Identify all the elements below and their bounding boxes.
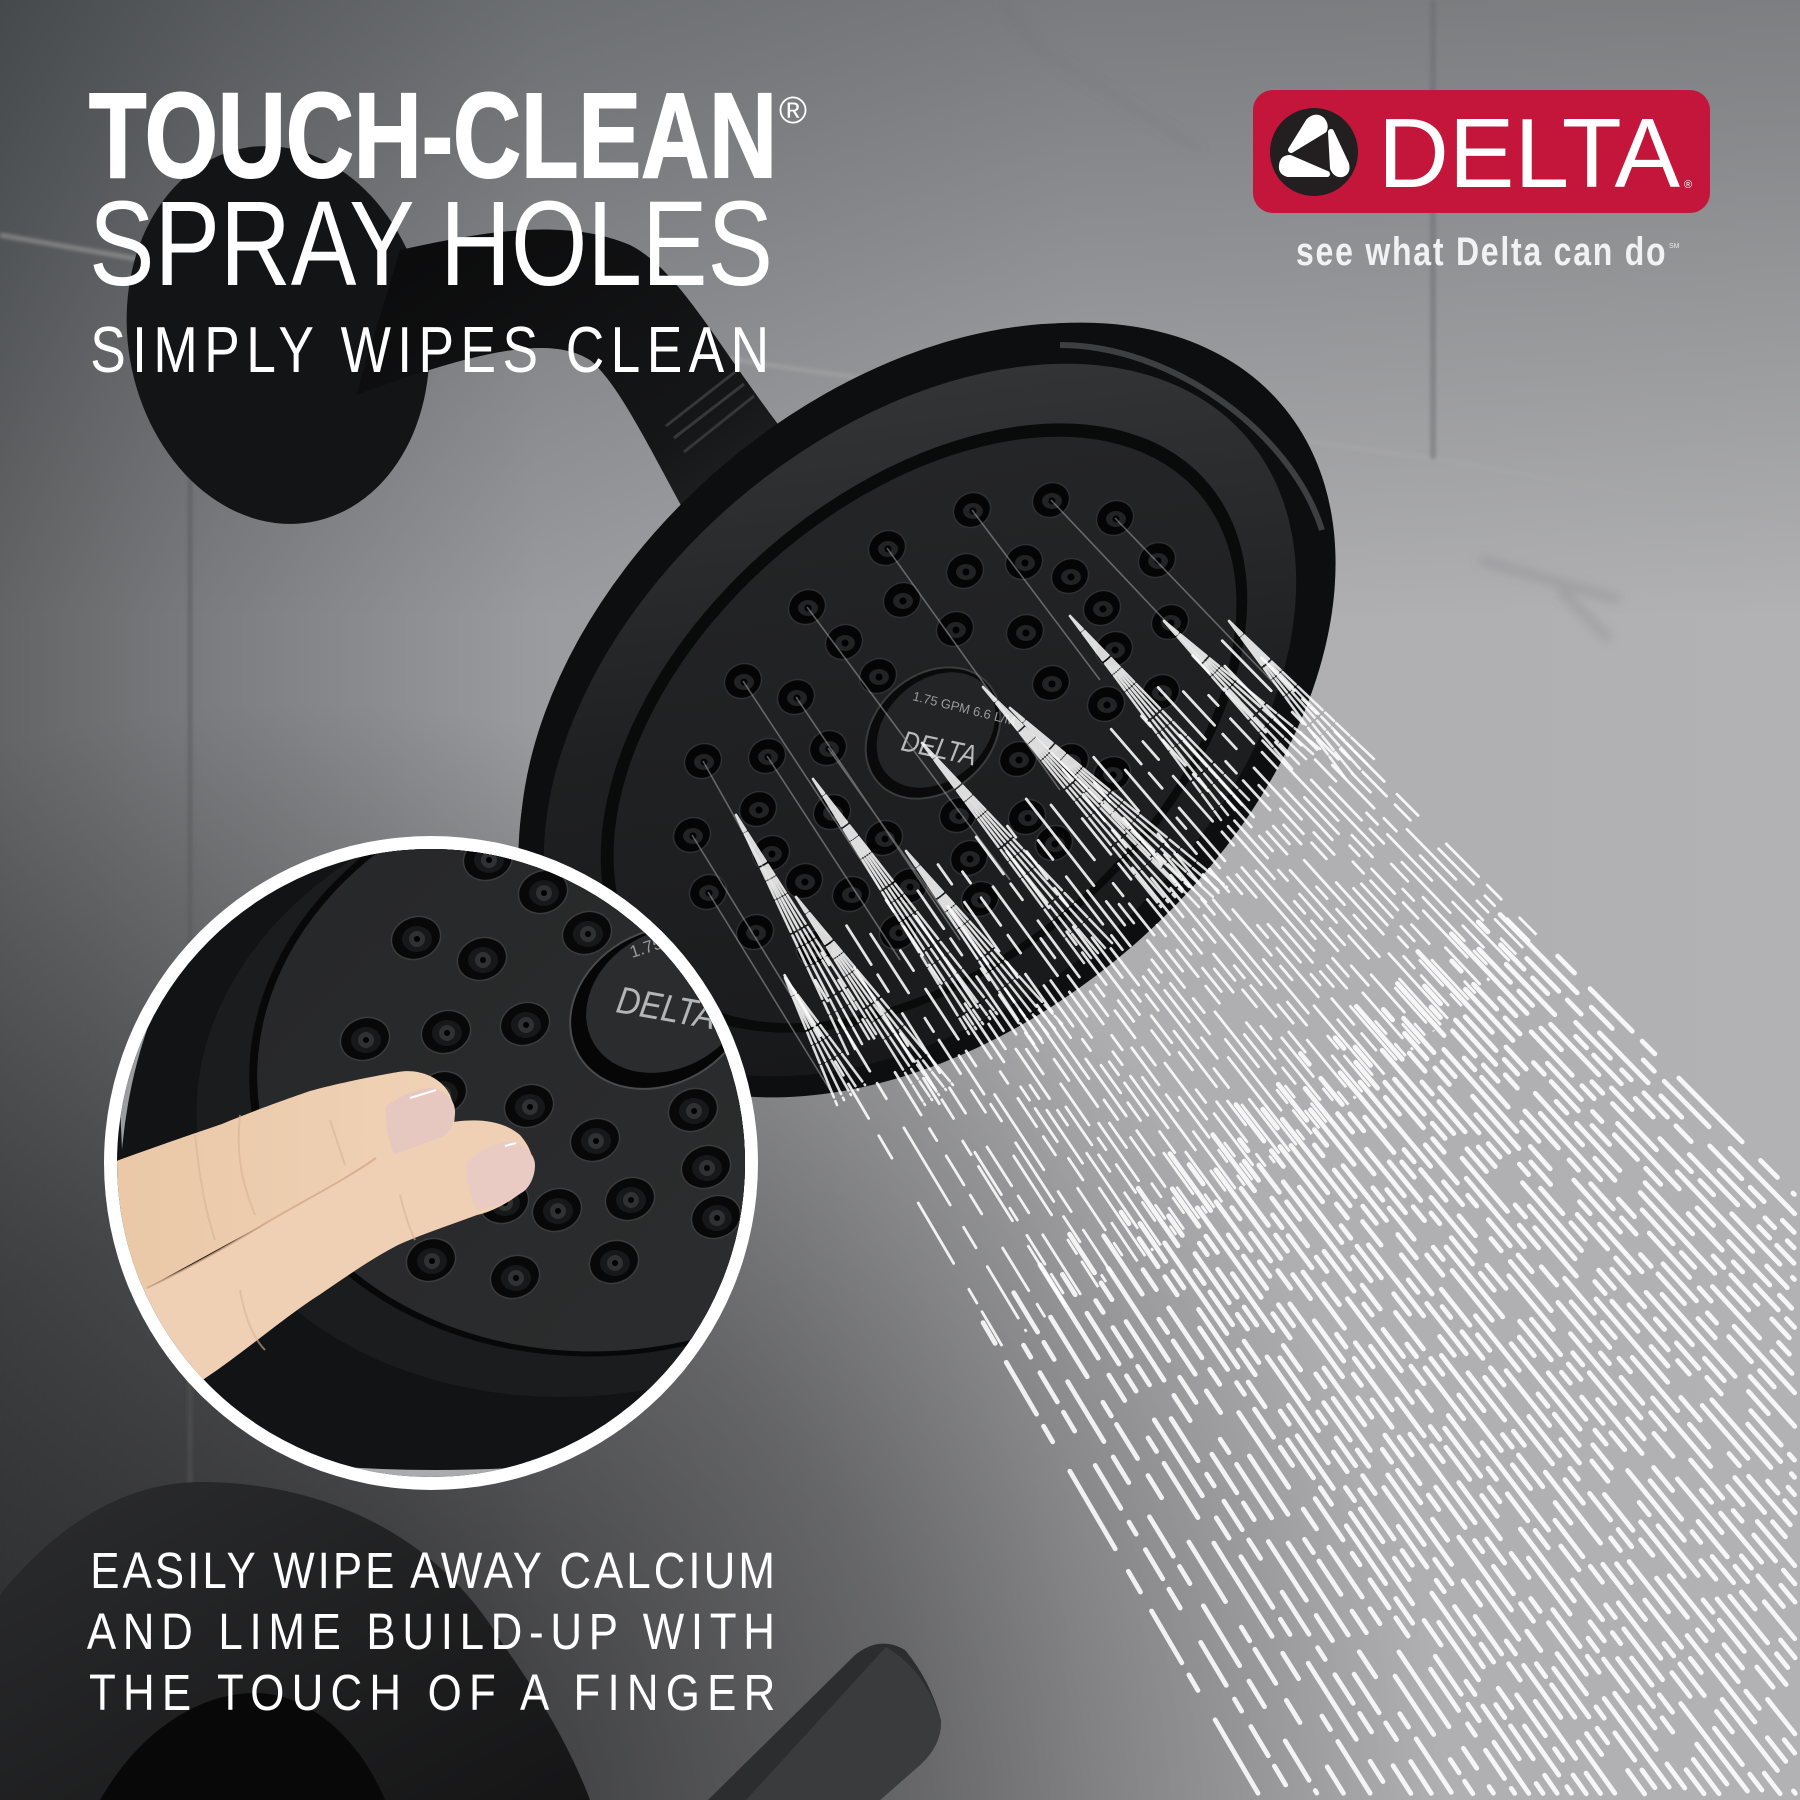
- inset badge: [569, 932, 725, 1090]
- subheading: SIMPLY WIPES CLEAN: [90, 313, 769, 386]
- center badge with logo: DELTA: [899, 726, 980, 773]
- registered mark: ®: [779, 90, 807, 132]
- body text: [87, 1543, 775, 1722]
- spray streaks, far range: [983, 914, 1795, 1794]
- center badge with logo: [839, 640, 1027, 826]
- inset badge: DELTA: [613, 980, 719, 1038]
- body text: AND LIME BUILD-UP WITH: [87, 1604, 775, 1661]
- fingers: [117, 1071, 535, 1380]
- logo: Delta: [1253, 90, 1710, 213]
- water spray fan: [736, 616, 1795, 1794]
- body text: EASILY WIPE AWAY CALCIUM: [90, 1543, 775, 1600]
- tagline: SM: [1669, 243, 1680, 250]
- thin jets leaving the holes: [692, 500, 1290, 1090]
- inset spray holes: [334, 831, 747, 1305]
- logo mark: [1270, 108, 1358, 196]
- inset badge: 1.75: [627, 934, 665, 962]
- icon: wall flange: [97, 122, 459, 548]
- inset circle: finger wiping spray holes: [104, 836, 758, 1490]
- tagline: see what Delta can do: [1296, 229, 1666, 274]
- bright jets near the head: [736, 616, 1374, 1105]
- heading: TOUCH-CLEAN: TOUCH-CLEAN: [89, 67, 777, 203]
- body text: THE TOUCH OF A FINGER: [89, 1665, 775, 1722]
- heading: SPRAY HOLES: SPRAY HOLES: [89, 175, 773, 311]
- center badge with logo: 1.75 GPM 6.6 L/M: [911, 688, 1017, 728]
- logo: Delta: DELTA: [1378, 98, 1681, 208]
- spray streaks, mid-range: [783, 639, 1538, 1347]
- tub-shower lever handle: [708, 1644, 941, 1800]
- shower head: [368, 167, 1486, 1253]
- logo: Delta: ®: [1684, 179, 1692, 191]
- shower arm: [356, 229, 790, 540]
- spray holes: [667, 476, 1195, 972]
- valve trim plate: [0, 1482, 590, 1800]
